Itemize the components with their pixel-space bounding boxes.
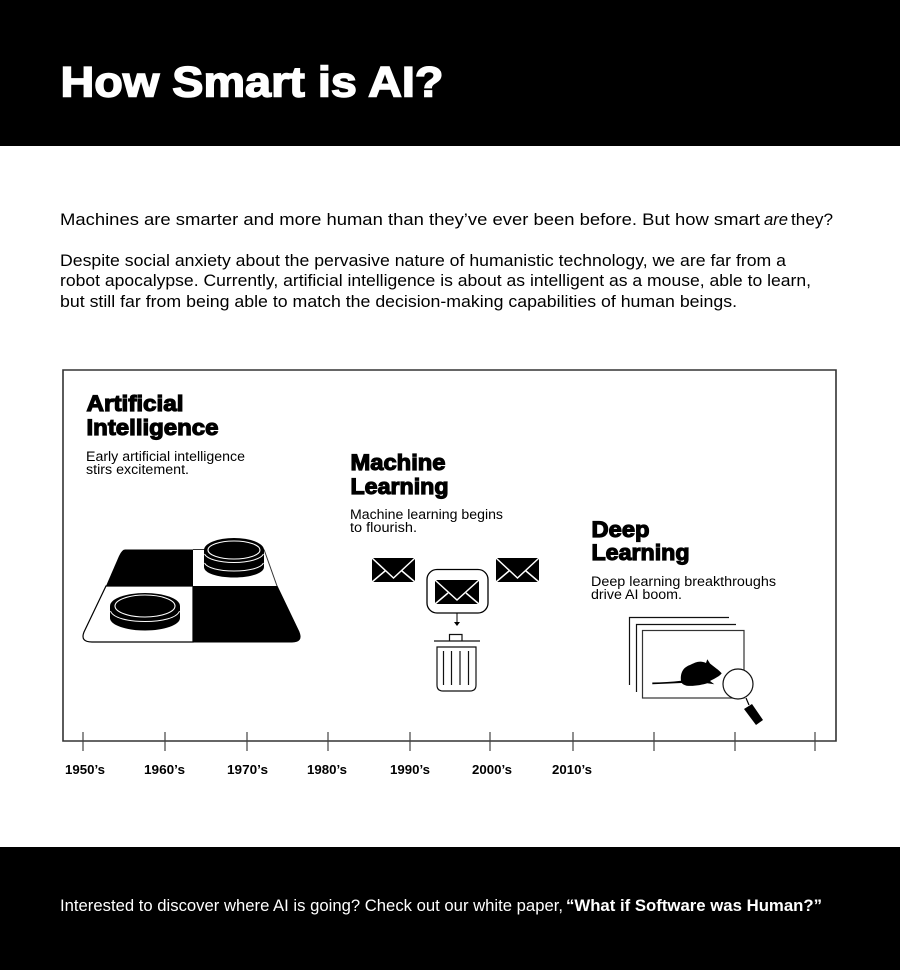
call to action — [60, 897, 822, 915]
envelope: left — [372, 558, 415, 582]
deep learning description: drive AI boom. — [591, 587, 682, 602]
intro text: robot apocalypse. Currently, artificial intelligence is about as intelligent as a mouse, able to learn, — [60, 272, 811, 290]
intro text: but still far from being able to match the decision-making capabilities of human beings. — [60, 293, 737, 311]
artificial intelligence heading — [86, 391, 218, 440]
intro text: are — [764, 211, 788, 229]
deep learning heading: Deep — [592, 517, 650, 542]
icon: email sorted to trash — [372, 558, 539, 691]
selected envelope box — [427, 570, 488, 613]
timeline ticks — [83, 732, 815, 751]
machine learning description: to flourish. — [350, 520, 417, 535]
title: How Smart is AI? — [60, 58, 444, 106]
intro text: they? — [791, 211, 833, 229]
call to action: “What if Software was Human?” — [566, 897, 822, 915]
timeline decade labels: 1990’s — [390, 762, 430, 777]
icon: trash can — [434, 634, 480, 691]
intro text — [60, 211, 833, 311]
artificial intelligence description — [86, 449, 245, 477]
artificial intelligence heading: Intelligence — [86, 415, 218, 440]
machine learning heading: Learning — [350, 474, 448, 499]
call to action: Interested to discover where AI is going? Check out our white paper, — [60, 897, 563, 915]
mouse silhouette — [652, 659, 722, 686]
deep learning heading — [592, 517, 690, 565]
artificial intelligence description: stirs excitement. — [86, 462, 189, 477]
timeline decade labels: 2010’s — [552, 762, 592, 777]
timeline decade labels: 1950’s — [65, 762, 105, 777]
header band — [0, 0, 900, 146]
timeline panel frame — [63, 370, 836, 741]
checker piece: upper right stack — [204, 538, 264, 578]
timeline decade labels: 2000’s — [472, 762, 512, 777]
machine learning heading — [350, 450, 448, 499]
footer band — [0, 847, 900, 970]
deep learning description: Deep learning breakthroughs — [591, 574, 776, 589]
intro text: Machines are smarter and more human than they’ve ever been before. But how smart — [60, 211, 760, 229]
icon: mouse image under magnifier — [630, 618, 763, 725]
checker piece: lower left — [110, 593, 180, 630]
envelope: right — [496, 558, 539, 582]
timeline decade labels: 1960’s — [144, 762, 185, 777]
timeline decade labels — [65, 762, 592, 777]
artificial intelligence description: Early artificial intelligence — [86, 449, 245, 464]
arrow — [454, 613, 460, 626]
machine learning description: Machine learning begins — [350, 507, 503, 522]
magnifier — [723, 669, 763, 725]
intro text: Despite social anxiety about the pervasive nature of humanistic technology, we are far from a — [60, 252, 787, 270]
timeline decade labels: 1980’s — [307, 762, 347, 777]
artificial intelligence heading: Artificial — [86, 391, 184, 416]
machine learning description — [350, 507, 503, 535]
timeline decade labels: 1970’s — [227, 762, 268, 777]
deep learning heading: Learning — [592, 540, 690, 565]
machine learning heading: Machine — [350, 450, 446, 475]
icon: checkers board — [83, 538, 300, 642]
deep learning description — [591, 574, 776, 602]
